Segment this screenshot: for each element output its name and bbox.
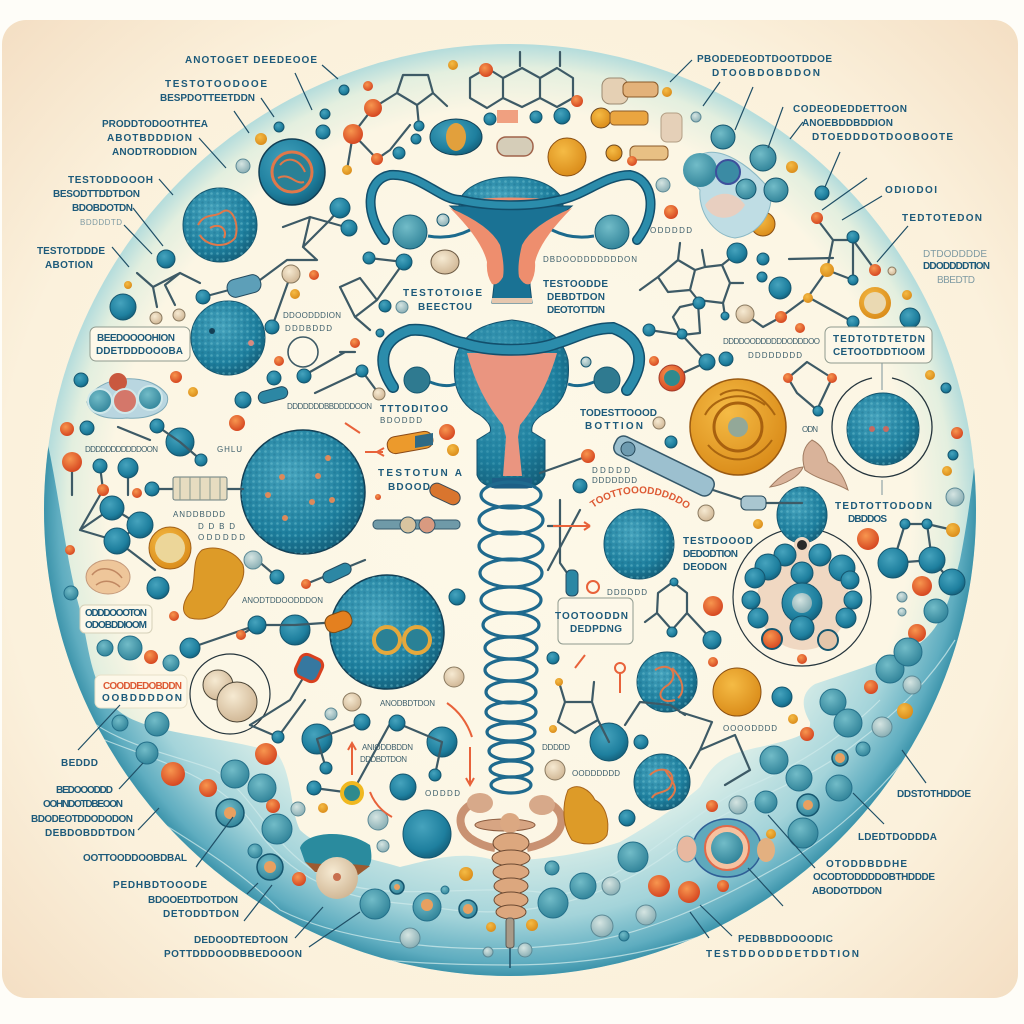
text labels: OOTTOODDOOBDBAL [83, 853, 187, 864]
text labels: BEDDD [61, 758, 98, 769]
text labels: DDDBDDD [285, 324, 332, 333]
text labels: BBEDTD [937, 275, 975, 286]
text labels: OOBDDDDON [102, 693, 182, 704]
text labels: PEDHBDTOOODE [113, 880, 207, 891]
text labels: DDDDOODDDDDDODDDOO [723, 337, 820, 346]
text labels: BESPDOTTEETDDN [160, 93, 255, 104]
pale fluid cells [291, 592, 921, 957]
text labels: TEDTOTDTETDN [833, 334, 925, 345]
medium teal cells [110, 294, 628, 858]
cluster left [87, 373, 168, 418]
text labels: ANIODDBDDN [362, 743, 413, 752]
text labels: TESTOTDDDE [37, 246, 105, 257]
text labels: DDETDDDOOOBA [96, 346, 183, 357]
capsule group: top right [591, 78, 682, 166]
text labels: TESTDOOOD [683, 536, 753, 547]
text labels: DDDDDDDDDDDOON [85, 445, 158, 454]
text labels: OOOODDDD [723, 724, 777, 733]
text labels: DEDPDNG [570, 624, 622, 635]
text labels: ANDDBDDD [173, 510, 225, 519]
text labels: BDOBDOTDN [72, 203, 133, 214]
text labels: PEDBBDDOOODIC [738, 934, 833, 945]
brain shaped organ [86, 560, 130, 594]
organ with bulb [300, 834, 371, 899]
text labels: ANODTRODDION [112, 147, 197, 158]
text labels: BESODTTDDTDON [53, 189, 140, 200]
text labels: TOOTOODDN [555, 611, 628, 622]
text labels: ODIODOI [885, 185, 937, 196]
text labels: PBODEDEODTDOOTDDOE [697, 54, 832, 65]
text labels: DEDOODTEDTOON [194, 935, 288, 946]
cell: speckled patterned [183, 188, 257, 262]
capsules [173, 78, 766, 803]
text labels: DDDBDTDON [360, 755, 407, 764]
text labels: GHLU [217, 445, 242, 454]
text labels: DDDDDDDD [748, 351, 802, 360]
text labels: DDDDD [542, 743, 570, 752]
text labels: DDSTOTHDDOE [897, 789, 971, 800]
red arrows [345, 423, 625, 817]
text labels: ODDDOOOTON [85, 608, 147, 619]
text labels: DDBD [198, 522, 235, 531]
text labels: ANODBDTDON [380, 699, 435, 708]
text labels: ABOTION [45, 260, 93, 271]
bottom fluid region [30, 440, 1000, 1000]
cell: left upper [191, 301, 265, 375]
curved red text: TOOTTOOODDDDDOOB [589, 486, 690, 508]
text labels: BDOOD [388, 482, 430, 493]
lower tan structure [461, 793, 561, 968]
bottom fluid cells [64, 586, 948, 957]
cluster top right [683, 125, 788, 238]
orange nodes [124, 60, 960, 813]
patterned cells: lower right [634, 652, 697, 810]
decorative fluid swirls [65, 640, 955, 965]
text labels: TODESTTOOOD [580, 408, 657, 419]
text labels: BDODDD [380, 416, 422, 425]
text labels: OTODDBDDHE [826, 859, 907, 870]
text labels: POTTDDDOODBBEDOOON [164, 949, 302, 960]
text labels: DDDDDDDBBDDDDOON [287, 402, 372, 411]
text labels: TESTOTOODOOE [165, 79, 267, 90]
upper uterus diagram [371, 175, 651, 303]
teal fluid cells [64, 586, 948, 941]
text labels: COODDEDOBDDN [103, 681, 182, 692]
leader lines [78, 60, 926, 947]
pipette [611, 433, 717, 499]
text labels: BDOOEDTDOTDON [148, 895, 238, 906]
text labels: ODDDD [425, 789, 460, 798]
text labels: ABODOTDDON [812, 886, 882, 897]
beige cell cluster [86, 440, 848, 899]
text labels: TTTODITOO [380, 404, 448, 415]
text labels: ANOEBDDBDDION [802, 118, 893, 129]
text labels: ODOBDDIOOM [85, 620, 147, 631]
cell: large central-left [241, 430, 365, 554]
text labels: ODN [802, 425, 818, 434]
text labels: TEDTOTTODODN [835, 501, 932, 512]
text labels: ANODTDDOODDDON [242, 596, 323, 605]
text labels: OCODTODDDDOBTHDDDE [813, 872, 935, 883]
text labels: ODDDDD [650, 226, 692, 235]
ornate orange cell [690, 379, 786, 475]
red-orange nodes [60, 63, 963, 667]
text labels: DDDDD [592, 466, 630, 475]
text labels: DBDOODDDDDDDON [543, 255, 637, 264]
text labels: DTOEDDDOTDOOBOOTE [812, 132, 953, 143]
text labels: BEDOOODDD [56, 785, 113, 796]
ring organelle top left [288, 337, 318, 367]
translucent clusters [87, 125, 788, 418]
text labels: DDODDDDTION [923, 261, 990, 272]
text labels: DDDDDDD [592, 476, 637, 485]
coil [479, 482, 543, 793]
cell: centre-right [604, 509, 674, 579]
orange cells [149, 138, 891, 716]
large cell with orange ring [677, 819, 775, 877]
text labels: DBDDOS [848, 514, 887, 525]
text labels: ODDDDD [198, 533, 245, 542]
red and orange fluid cells [144, 650, 878, 903]
cell: in ring [832, 363, 932, 495]
capsule: orange on cell [323, 609, 354, 635]
label boxes [80, 327, 932, 708]
text labels: DEBDTDON [547, 292, 605, 303]
text labels: OODDDDDD [572, 769, 620, 778]
text labels: DEBDOBDDTDON [45, 828, 135, 839]
text labels: CODEODEDDETTOON [793, 104, 907, 115]
text labels: BEECTOU [418, 302, 472, 313]
tan fins [770, 440, 848, 490]
oval cell with gold centre [430, 119, 482, 155]
text labels: DEDODTION [683, 549, 738, 560]
cell: dark patterned [259, 139, 325, 205]
teal nodes [74, 85, 965, 826]
right ring organelle [733, 487, 871, 666]
capsule: orange with red tip [386, 424, 459, 456]
text labels: DETODDTDON [163, 909, 239, 920]
text labels: TESTODDOOOH [68, 175, 153, 186]
text labels: ANOTOGET DEEDEOOE [185, 55, 317, 66]
multi-colour fluid cells [216, 750, 848, 918]
text labels: LDEDTDODDDA [858, 832, 937, 843]
text labels: TESTDDODDDETDDTION [706, 949, 859, 960]
text labels: TESTOODDE [543, 279, 608, 290]
text labels: TEDTOTEDON [902, 213, 982, 224]
text labels: DEOTOTTDN [547, 305, 605, 316]
large blue cells [110, 139, 932, 858]
small floating nodes [60, 60, 965, 852]
text labels: TESTOTUN A [378, 468, 462, 479]
text labels: DTOOBDOBDDON [712, 68, 820, 79]
text labels: BEEDOOOOHION [97, 333, 175, 344]
text labels: TESTOTOIGE [403, 288, 482, 299]
text labels: DDDDDD [607, 588, 647, 597]
text labels: ABOTBDDDION [107, 133, 192, 144]
text labels: BDODEOTDDODODON [31, 814, 133, 825]
cell: with gold rings [330, 575, 444, 689]
text labels: OOHNDOTDBEOON [43, 799, 123, 810]
orange-brown organ blobs [184, 548, 608, 844]
receptor bar [173, 477, 227, 500]
text labels: BDDDDTD [80, 218, 122, 227]
text labels: PRODDTODOOTHTEA [102, 119, 208, 130]
yellow ring node [342, 783, 362, 803]
lower uterus diagram [376, 320, 659, 488]
beige and pale nodes [150, 265, 896, 780]
text labels: DDOODDDION [283, 311, 341, 320]
molecule bonds [72, 52, 953, 793]
text labels: BOTTION [585, 421, 643, 432]
text labels: DEODON [683, 562, 727, 573]
text labels: DTDODDDDE [923, 249, 987, 260]
text labels: CETOOTDDTIOOM [833, 347, 925, 358]
